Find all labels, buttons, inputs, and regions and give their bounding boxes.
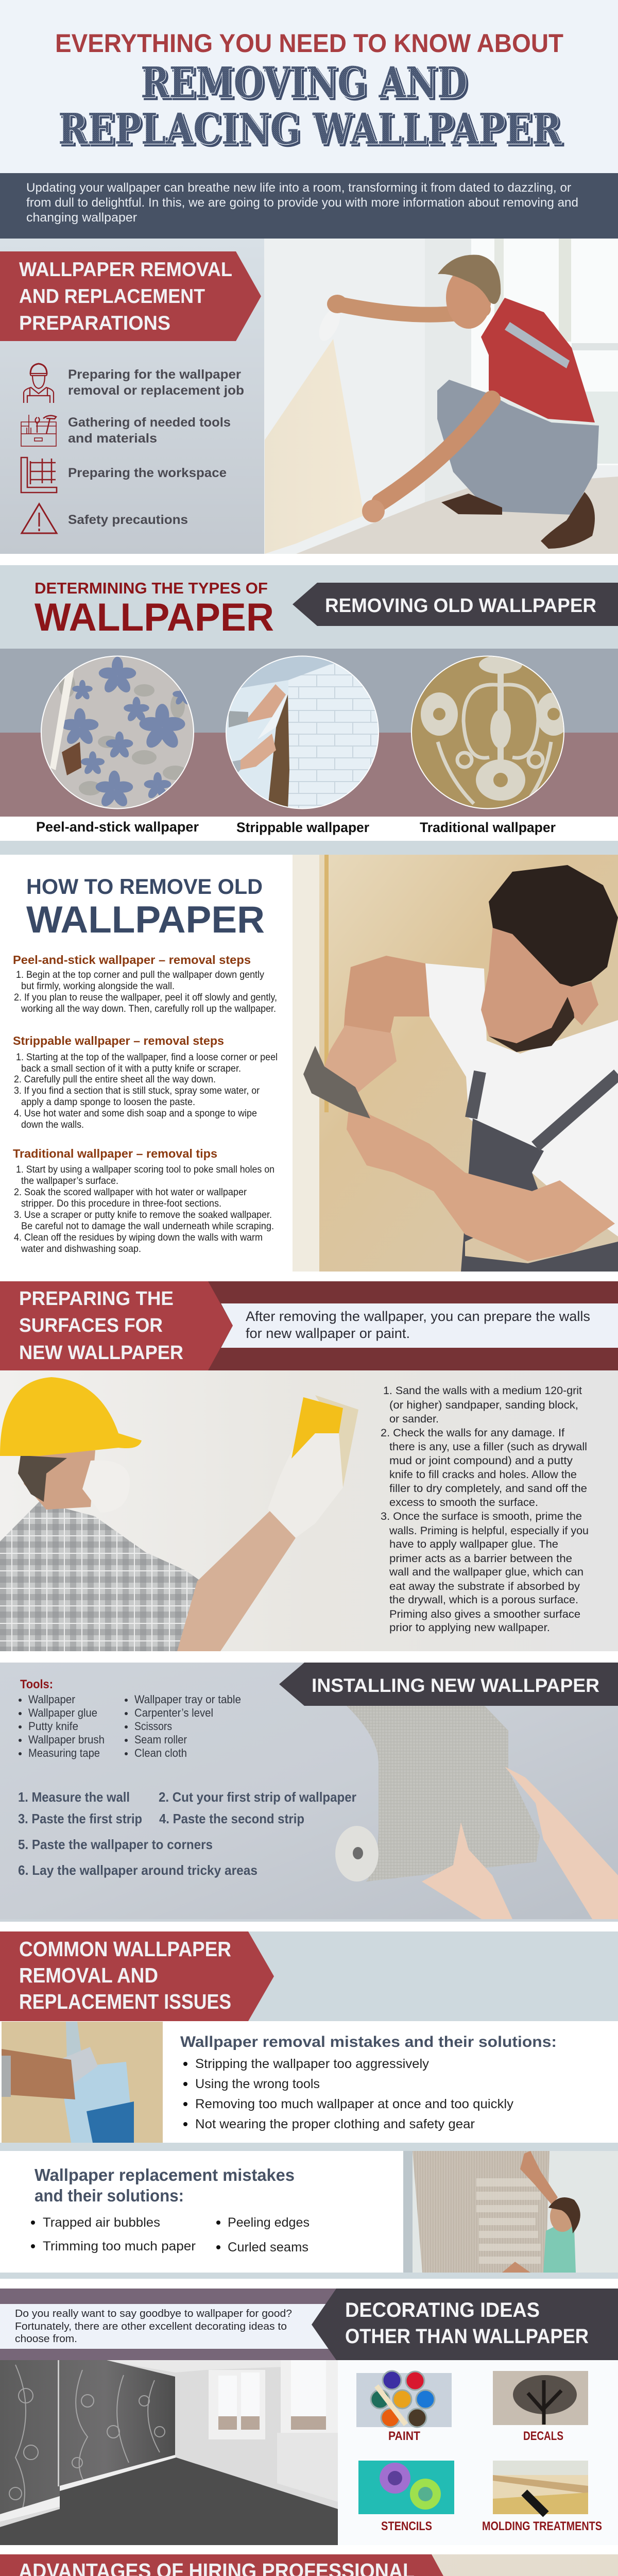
icon: warning triangle [22,504,57,533]
photo: room with dark floral wallpaper [0,2360,338,2545]
white row background [0,2021,618,2289]
text block: peel-and-stick steps: 1. Begin at the top corner and pull the wallpaper down gently [16,970,264,980]
red banner: preparations [0,251,261,341]
text block: traditional tips: Traditional wallpaper – removal tips [13,1147,217,1160]
text block: traditional tips: 1. Start by using a wallpaper scoring tool to poke small holes on [16,1164,274,1175]
text block: strippable steps: down the walls. [21,1120,84,1130]
text block: surface preparation steps: filler to dry completely, and sand off the [389,1482,587,1495]
text block: peel-and-stick steps [13,953,277,1014]
panel: installing new wallpaper [0,1663,618,1922]
banner: decorating ideas [0,2289,618,2360]
text block: surface preparation steps: primer acts as a barrier between the [389,1552,572,1565]
text block: surface preparation steps: have to apply wallpaper glue. The [389,1538,558,1550]
text block: strippable steps: Strippable wallpaper – removal steps [13,1034,224,1047]
tools list: Wallpaper glue [28,1706,97,1719]
text block: strippable steps: back a small section of it with a putty knife or scraper. [21,1063,241,1074]
heading: determining the types: WALLPAPER [35,596,274,639]
text block: surface preparation steps: Priming also gives a smoother surface [389,1608,580,1620]
red banner: preparations: AND REPLACEMENT [19,285,205,308]
text block: surface preparation steps: knife to fill cracks and holes. Allow the [389,1468,577,1481]
panel: common issues header: COMMON WALLPAPER [19,1937,231,1961]
left tinted panel [0,239,264,554]
installation steps: 5. Paste the wallpaper to corners [18,1837,213,1852]
text block: peel-and-stick steps: working all the way down. Then, carefully roll up the wallpaper. [21,1004,276,1014]
panel: how to remove old wallpaper [13,874,278,1255]
photo: decals [493,2371,588,2425]
white gap [0,554,618,565]
red banner: preparations: PREPARATIONS [19,312,170,334]
text block: surface preparation steps: mud or joint compound) and a putty [389,1454,573,1467]
banner: preparing the surfaces: SURFACES FOR [19,1315,163,1336]
title: EVERYTHING YOU NEED TO KNOW ABOUT [55,29,563,58]
icon: grid and ruler [21,457,57,493]
text block: surface preparation steps: 3. Once the surface is smooth, prime the [381,1510,582,1522]
text block: surface preparation steps: excess to smooth the surface. [389,1496,538,1509]
tools list: Clean cloth [134,1747,187,1759]
text block: traditional tips: 2. Soak the scored wallpaper with hot water or wallpaper [14,1187,247,1198]
installation steps: 2. Cut your first strip of wallpaper [159,1789,356,1805]
intro band: changing wallpaper [26,211,137,225]
heading: determining the types: DETERMINING THE TYPES OF [35,579,268,597]
banner: preparing the surfaces [0,1281,618,1370]
panel: replacement mistakes text: Trapped air bubbles [43,2215,160,2230]
heading: how to remove old wallpaper: HOW TO REMOVE OLD [26,874,263,899]
panel: removal mistakes text: Stripping the wallpaper too aggressively [195,2057,430,2071]
text block: strippable steps: 3. If you find a section that is still stuck, spray some water, or [14,1086,260,1096]
text block: strippable steps: 4. Use hot water and some dish soap and a sponge to wipe [14,1108,257,1119]
text block: traditional tips: 3. Use a scraper or putty knife to remove the soaked wallpaper. [14,1210,272,1221]
title: REMOVING AND [141,58,467,108]
panel: common issues header [0,1931,618,2021]
white gap [0,1272,618,1281]
photo: scraping blue wallpaper [2,2022,163,2143]
installation steps: 3. Paste the first strip [18,1811,142,1826]
white gap [0,1651,618,1663]
divider band [0,2273,618,2279]
banner: decorating ideas: Do you really want to say goodbye to wallpaper for good? [15,2308,292,2319]
panel: common issues header: REPLACEMENT ISSUES [19,1990,231,2013]
text: list items: Safety precautions [68,513,188,527]
text block: traditional tips: Be careful not to damage the wall underneath while scraping. [21,1221,274,1232]
panel: common issues header: REMOVAL AND [19,1963,158,1987]
photo: strippable wallpaper [226,655,379,809]
panel: replacement mistakes text: Curled seams [228,2240,308,2255]
banner: preparing the surfaces: PREPARING THE [19,1288,174,1310]
text block: strippable steps: apply a damp sponge to loosen the paste. [21,1097,195,1108]
text: list items: Preparing the workspace [68,466,227,480]
tools list [19,1677,241,1759]
divider band [0,2143,618,2151]
white gap [0,1922,618,1931]
text: list items: and materials [68,431,157,446]
tools list: Wallpaper tray or table [134,1693,241,1706]
label: decals: DECALS [523,2429,563,2443]
banner: decorating ideas: Fortunately, there are other excellent decorating ideas to [15,2321,287,2332]
panel: advantages of hiring professionals [0,2554,618,2576]
tools list: Wallpaper [28,1693,75,1706]
labels: wallpaper types: Traditional wallpaper [420,820,556,835]
photo: worker sanding wall [0,1370,618,1651]
text block: surface preparation steps: eat away the substrate if absorbed by [389,1580,580,1592]
icon: toolbox [21,415,57,446]
label: paint: PAINT [388,2429,420,2443]
icon: worker [24,364,54,403]
text block: surface preparation steps: 1. Sand the walls with a medium 120-grit [383,1384,582,1397]
labels: wallpaper types: Strippable wallpaper [236,820,369,835]
banner: decorating ideas: OTHER THAN WALLPAPER [345,2325,589,2348]
banner: decorating ideas: DECORATING IDEAS [345,2299,540,2321]
text: list items [68,367,244,527]
text block: traditional tips: water and dishwashing soap. [21,1244,141,1255]
photo: peel-and-stick wallpaper [41,655,194,809]
white panel background [0,855,293,1272]
installation steps: 6. Lay the wallpaper around tricky areas [18,1862,258,1878]
panel: replacement mistakes text [31,2165,310,2255]
text block: surface preparation steps: or sander. [389,1413,439,1425]
panel: removal mistakes text: Removing too much wallpaper at once and too quickly [195,2097,514,2111]
panel: determining the types of wallpaper [0,565,618,855]
text block: traditional tips [13,1147,274,1255]
banner: preparing the surfaces: NEW WALLPAPER [19,1342,183,1364]
panel: removal mistakes text: Using the wrong tools [195,2077,320,2091]
header background [0,0,618,173]
text block: strippable steps: 1. Starting at the top of the wallpaper, find a loose corner or peel [16,1052,278,1063]
red banner: preparations: WALLPAPER REMOVAL [19,259,232,281]
heading: how to remove old wallpaper: WALLPAPER [26,899,265,941]
banner: preparing the surfaces: After removing the wallpaper, you can prepare the walls [246,1309,590,1324]
panel: replacement mistakes text: Trimming too much paper [43,2239,196,2253]
photo: molding treatments [493,2461,588,2514]
panel: decorating ideas gallery [338,2360,618,2545]
intro band [0,173,618,239]
preparation list [21,364,244,533]
photo: paint [356,2371,452,2427]
heading: how to remove old wallpaper [26,874,265,941]
arrow heading: removing old wallpaper: REMOVING OLD WALLPAPER [325,595,596,617]
text block: strippable steps [13,1034,278,1130]
tools list: Wallpaper brush [28,1733,105,1746]
text block: surface preparation steps: the drywall, which is a porous surface. [389,1594,578,1606]
panel: removal mistakes text: Not wearing the proper clothing and safety gear [195,2117,475,2131]
text: list items: Preparing for the wallpaper [68,367,241,382]
tools list: Measuring tape [28,1747,100,1759]
text block: surface preparation steps: there is any, use a filler (such as drywall [389,1440,587,1453]
panel: replacement mistakes text: Wallpaper replacement mistakes [35,2165,295,2184]
text: list items: removal or replacement job [68,383,244,398]
text block: strippable steps: 2. Carefully pull the entire sheet all the way down. [14,1074,216,1085]
tools list: Carpenter’s level [134,1706,213,1719]
text block: peel-and-stick steps: but firmly, working alongside the wall. [21,981,175,992]
title [55,29,563,154]
installation steps: 4. Paste the second strip [159,1811,304,1826]
tools list: Putty knife [28,1720,78,1733]
photo: stencils [358,2461,454,2514]
panel: replacement mistakes text: Peeling edges [228,2215,310,2230]
panel: removal mistakes text: Wallpaper removal mistakes and their solutions: [180,2033,557,2050]
label: stencils: STENCILS [381,2519,432,2533]
panel: removal mistakes text [180,2033,557,2131]
text block: surface preparation steps: 2. Check the walls for any damage. If [381,1427,564,1439]
photo: traditional wallpaper [411,655,571,809]
text: list items: Gathering of needed tools [68,415,231,430]
text block: traditional tips: 4. Clean off the residues by wiping down the walls with warm [14,1232,263,1243]
text block: surface preparation steps: walls. Priming is helpful, especially if you [389,1524,589,1537]
installation steps: 1. Measure the wall [18,1789,130,1805]
text block: surface preparation steps: prior to applying new wallpaper. [389,1621,550,1634]
tools list: Tools: [20,1677,53,1691]
text block: traditional tips: the wallpaper’s surface. [21,1176,118,1187]
text block: traditional tips: stripper. Do this procedure in three-foot sections. [21,1198,221,1209]
photo: man peeling wallpaper [264,239,618,554]
photo: wallpaper roll and hands [0,1663,618,1919]
labels: wallpaper types: Peel-and-stick wallpaper [36,819,199,835]
tools list: Scissors [134,1720,172,1733]
text block: peel-and-stick steps: Peel-and-stick wallpaper – removal steps [13,953,251,967]
tools list: Seam roller [134,1733,187,1746]
installation steps [18,1789,356,1878]
photo: man scraping wall [293,855,618,1272]
text block: surface preparation steps [381,1384,589,1634]
arrow heading: installing new wallpaper: INSTALLING NEW WALLPAPER [312,1675,599,1696]
panel: replacement mistakes text: and their solutions: [35,2186,184,2205]
text block: peel-and-stick steps: 2. If you plan to reuse the wallpaper, peel it off slowly and gently, [14,992,277,1003]
intro band: from dull to delightful. In this, we are going to provide you with more information about removing and [26,196,578,210]
text block: surface preparation steps: wall and the wallpaper glue, which can [389,1566,583,1578]
arrow heading: installing new wallpaper [279,1663,618,1706]
banner: decorating ideas: choose from. [15,2333,77,2345]
white gap [0,2545,618,2554]
arrow heading: removing old wallpaper [293,583,618,626]
labels: wallpaper types [36,819,556,835]
banner: preparing the surfaces: for new wallpaper or paint. [246,1326,410,1341]
intro band: Updating your wallpaper can breathe new life into a room, transforming it from dated to dazzling, or [26,181,571,195]
text block: surface preparation steps: (or higher) sandpaper, sanding block, [389,1399,578,1411]
photo: man hanging wallpaper [403,2151,618,2273]
